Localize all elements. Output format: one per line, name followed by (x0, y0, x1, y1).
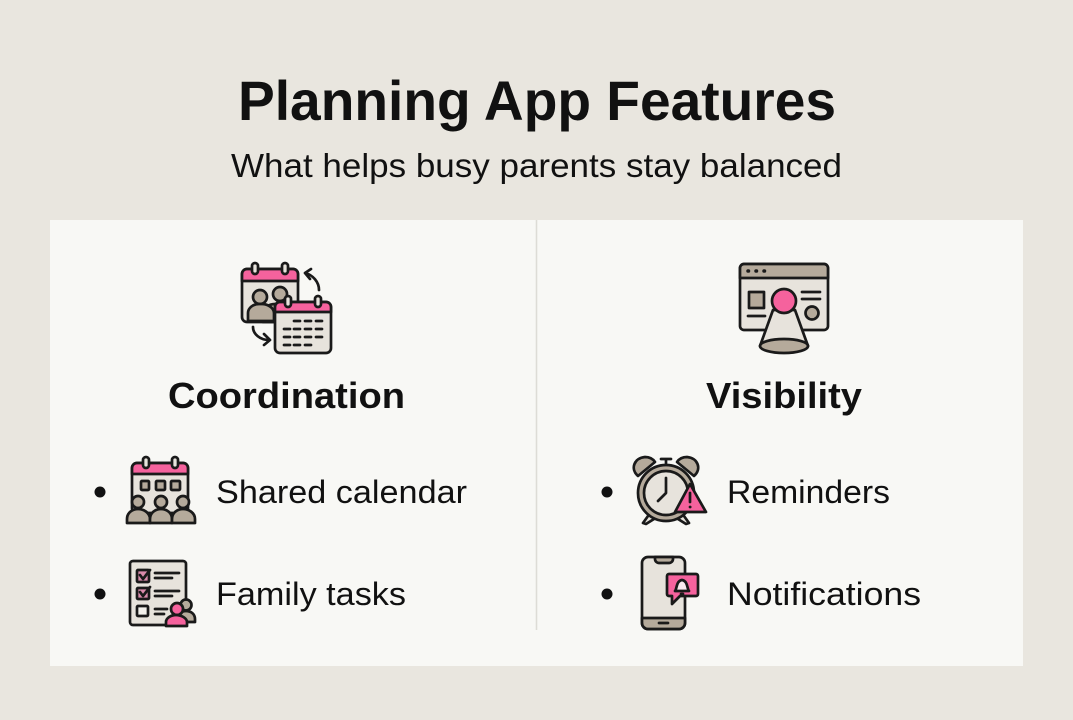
label: Family tasks: Family tasks (216, 576, 406, 612)
icon: two calendars with sync arrows (242, 263, 331, 353)
heading: Visibility: Visibility (706, 375, 862, 416)
icon: phone with bell notification (642, 557, 698, 629)
list item: Notifications (602, 557, 921, 629)
title: Planning App Features (238, 69, 836, 132)
panel: features card (50, 220, 1023, 666)
icon: alarm clock with warning (634, 457, 706, 524)
icon: calendar with three people (127, 457, 195, 523)
label: Notifications: Notifications (727, 576, 921, 612)
list item: Shared calendar (94, 457, 467, 523)
label: Reminders: Reminders (727, 474, 890, 510)
icon: task checklist with family (130, 561, 195, 626)
label: Shared calendar: Shared calendar (216, 474, 467, 510)
list item: Reminders (602, 457, 890, 524)
list item: Family tasks (94, 561, 406, 626)
panel: visibility column (602, 264, 921, 629)
heading: Coordination: Coordination (168, 375, 405, 416)
panel: coordination column (94, 263, 467, 626)
icon: browser window with spotlight (740, 264, 828, 353)
subtitle: What helps busy parents stay balanced (231, 147, 842, 184)
